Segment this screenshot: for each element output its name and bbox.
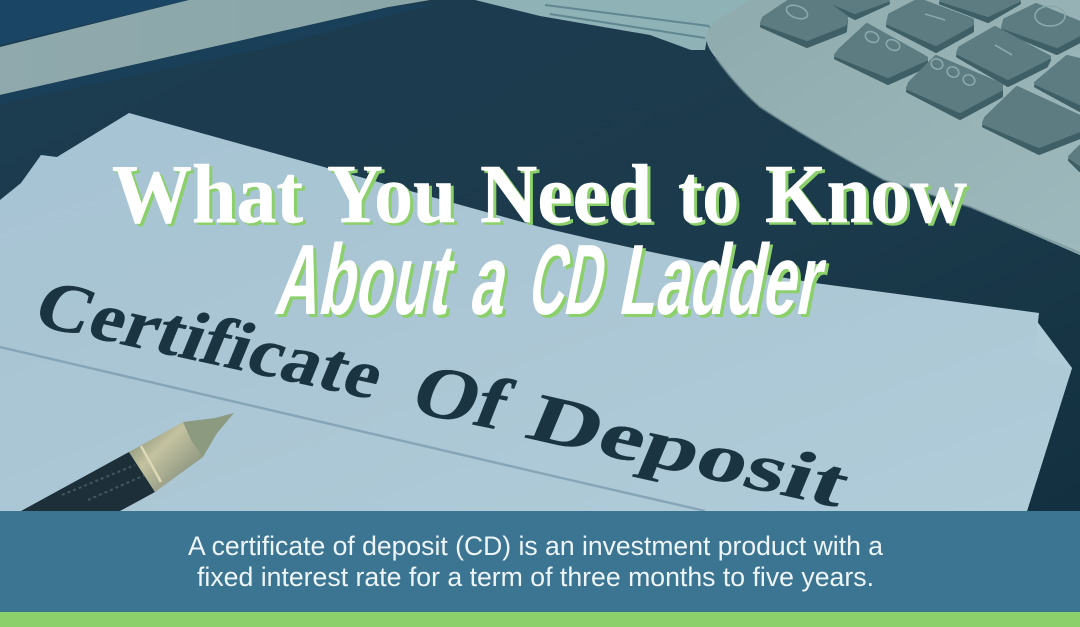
title shadow — [115, 150, 970, 244]
icon: book pages — [0, 0, 430, 95]
certificate heading — [24, 266, 861, 522]
icon: dark book cover — [0, 0, 189, 45]
description text: A certificate of deposit (CD) is an investment product with a — [188, 531, 883, 561]
green footer bar — [0, 612, 1080, 627]
description text: fixed interest rate for a term of three months to five years. — [197, 562, 874, 592]
paper fold line — [0, 347, 705, 511]
subtitle text: About — [269, 223, 464, 336]
title shadow: What — [115, 150, 306, 244]
certificate heading: Of — [401, 350, 522, 446]
certificate heading: Deposit — [517, 380, 861, 522]
calculator keys shadow — [762, 3, 1080, 170]
certificate heading: Certificate — [24, 266, 396, 414]
subtitle text: Ladder — [613, 223, 835, 336]
subtitle text — [269, 223, 835, 336]
subtitle — [269, 223, 838, 339]
title text: to — [678, 148, 739, 241]
icon: certificate paper — [0, 113, 1072, 511]
description text — [188, 531, 883, 592]
subtitle shadow: CD — [525, 227, 619, 339]
title text: Need — [480, 148, 652, 241]
title text: You — [327, 148, 456, 241]
subtitle shadow: a — [467, 226, 523, 339]
calculator keys — [762, 0, 1080, 164]
title shadow: You — [330, 150, 459, 244]
icon: calculator — [706, 0, 1080, 255]
title shadow: Need — [483, 150, 655, 244]
title shadow: to — [681, 150, 742, 244]
icon: fountain pen — [21, 413, 234, 511]
icon: cash stack — [475, 0, 753, 50]
main title — [112, 148, 970, 244]
subtitle shadow — [272, 226, 838, 339]
icon: back paper sheet — [960, 320, 1072, 511]
subtitle shadow: Ladder — [616, 226, 838, 339]
title text: What — [112, 148, 303, 241]
subtitle shadow: About — [272, 226, 467, 339]
title shadow: Know — [768, 150, 970, 244]
subtitle text: CD — [522, 224, 616, 336]
title text — [112, 148, 967, 241]
title text: Know — [765, 148, 967, 241]
subtitle text: a — [464, 223, 520, 336]
description band — [0, 511, 1080, 612]
